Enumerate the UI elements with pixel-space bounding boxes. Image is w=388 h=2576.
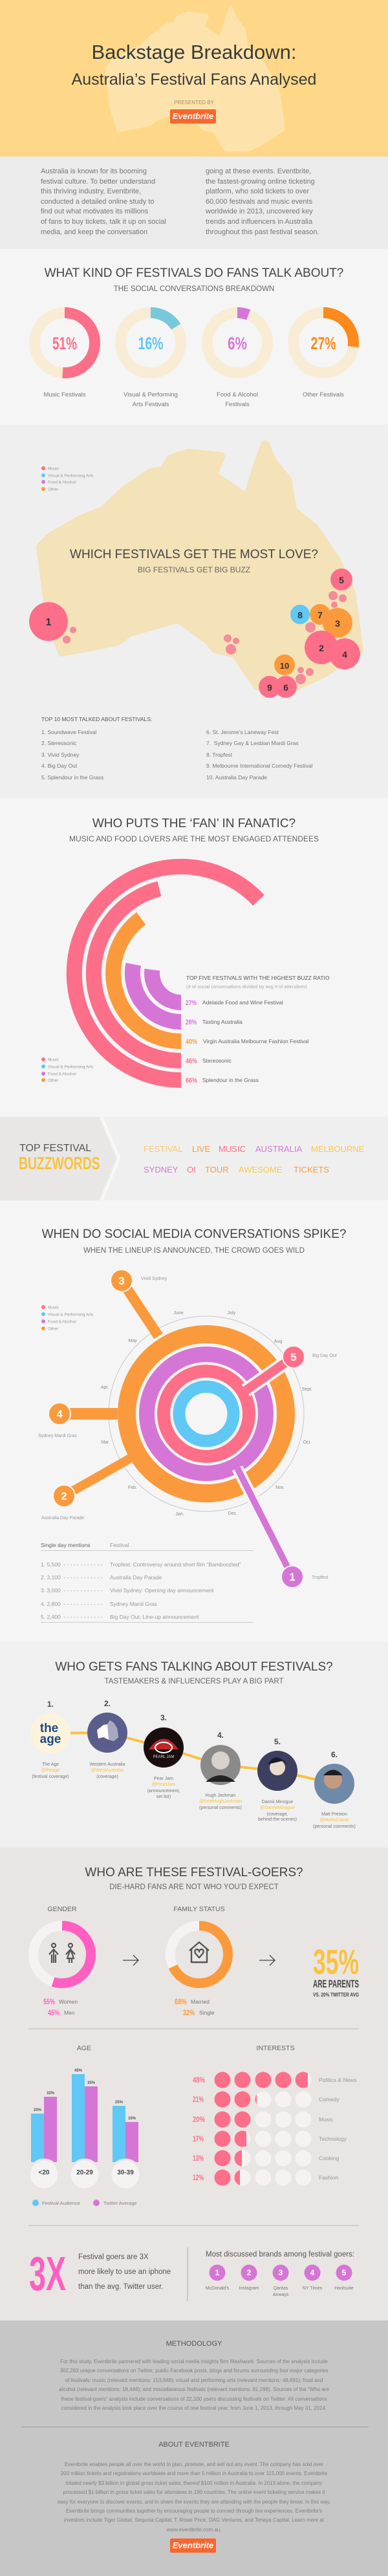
- subtitle: Australia’s Festival Fans Analysed: [72, 70, 316, 89]
- panel: map: 2. Stereosonic: [41, 740, 76, 746]
- arc chart: Virgin Australia Melbourne Fashion Festival: [203, 1038, 308, 1044]
- arc chart: Splendour in the Grass: [202, 1077, 259, 1083]
- intro text: trends and influencers in Australia: [206, 218, 312, 226]
- bubbles: 8: [297, 610, 303, 620]
- demographic charts: Women: [59, 1998, 78, 2005]
- subheading: MUSIC AND FOOD LOVERS ARE THE MOST ENGAGED ATTENDEES: [69, 834, 319, 843]
- map of australia: [41, 445, 359, 686]
- buzzword list: MUSIC: [219, 1144, 246, 1154]
- demographic charts: 2: [247, 2268, 252, 2277]
- mentions table: Australia Day Parade: [110, 1574, 162, 1581]
- donut charts: 51%: [52, 334, 77, 353]
- radial chart: Music: [48, 1305, 59, 1310]
- demographic charts: Twitter Average: [103, 2200, 137, 2206]
- mentions table: 5. 2,400 - - - - - - - - - - - -: [41, 1614, 102, 1620]
- methodology text: of festivals: music (relevant mentions: 153,848); visual and performing arts (relevant mentions: 48,691); food and: [65, 2377, 323, 2383]
- demographic charts: Married: [191, 1998, 210, 2005]
- radial chart: Tropfest: [312, 1575, 328, 1580]
- influencer chain: @RealHughJackman: [199, 1799, 242, 1804]
- radial chart: Oct.: [303, 1440, 311, 1445]
- demographic charts: than the avg. Twitter user.: [78, 2283, 163, 2291]
- demographic charts: 4: [310, 2268, 315, 2277]
- buzzword list: FESTIVAL: [144, 1144, 182, 1154]
- buzzword list: MELBOURNE: [311, 1144, 364, 1154]
- donut charts: 6%: [228, 334, 247, 353]
- heading: WHO GETS FANS TALKING ABOUT FESTIVALS?: [55, 1660, 333, 1674]
- donut charts: Music Festivals: [44, 391, 86, 398]
- demographic charts: VS. 20% TWITTER AVG: [313, 1992, 359, 1998]
- demographic charts: Airways: [273, 2293, 289, 2297]
- radial chart: Other: [48, 1327, 59, 1331]
- panel: buzzwords: BUZZWORDS: [19, 1153, 100, 1173]
- donut charts: [29, 307, 359, 408]
- radial chart: 2: [61, 1490, 67, 1502]
- intro text: worldwide in 2013, uncovered key: [206, 208, 313, 215]
- footer logo: [170, 2538, 216, 2553]
- demographic charts: 55%: [43, 1997, 55, 2006]
- radial chart: Apr.: [101, 1385, 109, 1390]
- influencer chain: @DanniiMinogue: [260, 1806, 295, 1810]
- demographic charts: 68%: [175, 1997, 187, 2006]
- about text: [58, 2462, 330, 2533]
- title: Backstage Breakdown:: [91, 41, 297, 63]
- arc chart: Visual & Performing Arts: [48, 1065, 94, 1070]
- influencer chain: @PearlJam: [152, 1782, 176, 1787]
- donut charts: Festivals: [225, 401, 250, 408]
- intro text: throughout this past festival season.: [206, 228, 319, 236]
- influencer chain: 5.: [274, 1737, 281, 1746]
- panel: map: 3. Vivid Sydney: [41, 752, 79, 758]
- influencer chain: Hugh Jackman: [206, 1793, 235, 1798]
- mentions table: 4. 2,800 - - - - - - - - - - - -: [41, 1601, 102, 1607]
- demographic charts: Men: [64, 2009, 75, 2016]
- demographic charts: NY Times: [303, 2286, 323, 2291]
- bubbles: 7: [318, 610, 323, 620]
- demographic charts: Fashion: [319, 2174, 339, 2181]
- panel: map: 9. Melbourne International Comedy Festival: [206, 763, 312, 769]
- intro text: of fans to buy tickets, talk it up on social: [41, 218, 166, 226]
- intro text: going at these events. Eventbrite,: [206, 168, 311, 175]
- radial chart: Vivid Sydney: [141, 1277, 167, 1281]
- radial chart: 1: [289, 1571, 296, 1583]
- radial chart: Dec.: [228, 1511, 237, 1516]
- panel: map: 6. St. Jerome’s Laneway Fest: [206, 729, 279, 735]
- donut charts: 16%: [138, 334, 163, 353]
- demographic charts: Cooking: [319, 2155, 339, 2161]
- influencer chain: (personal comments): [313, 1824, 356, 1829]
- radial chart: July: [228, 1311, 236, 1315]
- radial chart: Sydney Mardi Gras: [38, 1434, 77, 1438]
- intro text: Australia is known for its booming: [41, 168, 147, 175]
- legend: Visual & Performing Arts: [48, 473, 94, 479]
- demographic charts: Technology: [319, 2136, 347, 2142]
- about heading: ABOUT EVENTBRITE: [158, 2441, 230, 2449]
- influencer chain: 4.: [217, 1731, 224, 1740]
- buzzword list: AUSTRALIA: [255, 1144, 302, 1154]
- methodology text: 302,283 unique conversations on Twitter, public Facebook posts, blogs and forums surrounding four major categories: [60, 2368, 328, 2374]
- buzzword list: LIVE: [192, 1144, 210, 1154]
- buzzword list: OI: [187, 1165, 196, 1174]
- buzzword list: TOUR: [205, 1165, 229, 1174]
- donut charts: Other Festivals: [303, 391, 344, 398]
- arc chart: 40%: [186, 1038, 197, 1046]
- radial chart: May: [128, 1339, 137, 1343]
- demographic charts: [28, 1905, 359, 2301]
- panel: spike: [0, 1200, 388, 1641]
- methodology text: For this study, Eventbrite partnered with leading social media insights firm Mashwork. Sources of the analysis include: [60, 2359, 328, 2365]
- panel: buzzwords: [0, 1117, 388, 1200]
- demographic charts: 5: [342, 2268, 347, 2277]
- demographic charts: Festival Audience: [42, 2200, 80, 2206]
- methodology text: alcohol (relevant mentions: 18,446); and miscellaneous festivals (relevant mentions: 81,298). Sources of the “Who are: [59, 2387, 329, 2392]
- demographic charts: 32%: [183, 2008, 195, 2017]
- panel: map: [0, 425, 388, 798]
- subheading: THE SOCIAL CONVERSATIONS BREAKDOWN: [114, 285, 274, 293]
- demographic charts: 45%: [48, 2008, 59, 2017]
- panel: demographics: [0, 1848, 388, 2321]
- demographic charts: 25%: [115, 2101, 124, 2105]
- arc chart: Music: [48, 1058, 59, 1062]
- influencer chain: 6.: [331, 1750, 338, 1759]
- radial chart: 5: [290, 1351, 297, 1363]
- radial chart: 3: [118, 1275, 125, 1287]
- radial chart: [38, 1270, 337, 1587]
- buzzword list: [144, 1144, 364, 1174]
- about text: processed $1 billion in gross ticket sales for attendees in 190 countries. The online event ticketing service makes it: [63, 2489, 325, 2495]
- demographic charts: 35%: [87, 2081, 96, 2085]
- about text: totaled nearly $3 billion in global gross ticket sales, thereof $100 million in Australia. In 2013 alone, the company: [66, 2480, 322, 2486]
- demographic charts: AGE: [77, 2044, 91, 2052]
- demographic charts: 12%: [193, 2173, 204, 2182]
- demographic charts: 3X: [29, 2247, 66, 2300]
- top 10 list: TOP 10 MOST TALKED ABOUT FESTIVALS:: [41, 716, 152, 722]
- bubbles: 5: [339, 575, 344, 585]
- panel: map: 10. Australia Day Parade: [206, 774, 267, 781]
- radial chart: Nov.: [275, 1486, 285, 1490]
- subheading: TASTEMAKERS & INFLUENCERS PLAY A BIG PART: [105, 1678, 283, 1685]
- influencer chain: 2.: [104, 1699, 111, 1708]
- radial chart: Food & Alcohol: [48, 1319, 76, 1325]
- header map decoration: [105, 6, 285, 151]
- demographic charts: Hootsuite: [334, 2286, 354, 2291]
- bubbles: 10: [280, 661, 289, 671]
- intro text: conducted a detailed online study to: [41, 198, 155, 206]
- demographic charts: <20: [39, 2169, 50, 2176]
- demographic charts: Single: [199, 2009, 215, 2016]
- heading: WHAT KIND OF FESTIVALS DO FANS TALK ABOUT?: [45, 266, 343, 280]
- footer logo: Eventbrite: [173, 2540, 213, 2550]
- arc chart: Tasting Australia: [202, 1019, 242, 1025]
- demographic charts: 20-29: [76, 2169, 93, 2176]
- panel: map: 7. Sydney Gay & Lesbian Mardi Gras: [206, 740, 299, 746]
- mentions table: 3. 3,000 - - - - - - - - - - - -: [41, 1587, 102, 1594]
- demographic charts: more likely to use an iphone: [78, 2268, 171, 2276]
- mentions table: 2. 3,100 - - - - - - - - - - - -: [41, 1574, 102, 1581]
- intro text: [0, 157, 388, 249]
- demographic charts: 1: [215, 2268, 220, 2277]
- mentions table: [41, 1542, 253, 1623]
- legend: Food & Alcohol: [48, 480, 76, 485]
- heading: WHEN DO SOCIAL MEDIA CONVERSATIONS SPIKE?: [42, 1228, 346, 1241]
- influencer chain: set list): [156, 1795, 171, 1799]
- methodology heading: METHODOLOGY: [166, 2340, 222, 2348]
- demographic charts: 30-39: [117, 2169, 134, 2176]
- methodology text: these festival-goers” analysis include conversations of 22,100 users discussing festivals on Twitter. All conversations: [61, 2396, 327, 2402]
- influencer chain: 3.: [160, 1713, 167, 1722]
- influencer chain: (personal comments): [199, 1806, 242, 1810]
- panel: festival types: [0, 249, 388, 425]
- bubbles: 1: [46, 617, 52, 628]
- demographic charts: FAMILY STATUS: [173, 1905, 225, 1913]
- donut charts: 27%: [310, 334, 336, 353]
- heading: WHICH FESTIVALS GET THE MOST LOVE?: [70, 548, 318, 561]
- about text: www.eventbrite.com.au.: [167, 2527, 221, 2533]
- demographic charts: Instagram: [239, 2286, 259, 2291]
- methodology text: [59, 2359, 329, 2411]
- influencer chain: Western Australia: [90, 1762, 125, 1767]
- about text: investors include Tiger Global, Sequoia Capital, T. Rowe Price, DAG Ventures, and Tenaya Capital. Learn more at: [64, 2517, 324, 2523]
- arc chart: 46%: [186, 1057, 197, 1065]
- demographic charts: Politics & News: [319, 2077, 357, 2083]
- intro text: this thriving industry, Eventbrite,: [41, 188, 141, 195]
- influencer chain: [30, 1699, 356, 1829]
- radial chart: Mar.: [101, 1440, 110, 1445]
- buzzword list: AWESOME: [239, 1165, 282, 1174]
- about text: easy for everyone to discover events, and to share the events they are attending with the people they know. In this way,: [58, 2499, 330, 2505]
- legend: Music: [48, 467, 59, 471]
- arc chart: 66%: [186, 1077, 197, 1085]
- arc chart: Other: [48, 1079, 59, 1083]
- buzzword list: TICKETS: [294, 1165, 329, 1174]
- influencer chain: age: [40, 1733, 61, 1746]
- mentions table: Sydney Mardi Gras: [110, 1601, 157, 1607]
- arc chart: 27%: [186, 999, 197, 1007]
- mentions table: Vivid Sydney: Opening day announcement: [110, 1587, 214, 1594]
- presented by: PRESENTED BY: [174, 100, 214, 105]
- radial chart: 4: [56, 1408, 63, 1420]
- demographic charts: 21%: [193, 2095, 204, 2104]
- subheading: BIG FESTIVALS GET BIG BUZZ: [138, 565, 250, 574]
- about text: Eventbrite brings communities together by encouraging people to connect through live experiences. Eventbrite’s: [66, 2508, 322, 2514]
- influencer chain: @MattsCravat: [320, 1818, 349, 1823]
- demographic charts: Comedy: [319, 2096, 339, 2103]
- mentions table: Festival: [110, 1542, 129, 1548]
- eventbrite logo: [170, 109, 216, 124]
- demographic charts: INTERESTS: [257, 2044, 294, 2052]
- subheading: WHEN THE LINEUP IS ANNOUNCED, THE CROWD GOES WILD: [83, 1247, 305, 1255]
- panel: map: 4. Big Day Out: [41, 763, 77, 769]
- bubbles: 3: [335, 618, 340, 629]
- demographic charts: McDonald's: [206, 2286, 230, 2291]
- demographic charts: 32%: [47, 2092, 55, 2095]
- demographic charts: Music: [319, 2116, 334, 2123]
- intro text: the fastest-growing online ticketing: [206, 178, 315, 186]
- demographic charts: GENDER: [48, 1905, 77, 1913]
- influencer chain: (coverage): [96, 1775, 118, 1779]
- influencer chain: Pear Jam: [154, 1777, 173, 1781]
- radial chart: Aug: [274, 1339, 282, 1344]
- arc chart: TOP FIVE FESTIVALS WITH THE HIGHEST BUZZ RATIO: [186, 975, 330, 981]
- arc chart: 28%: [186, 1019, 197, 1026]
- radial chart: Visual & Performing Arts: [48, 1313, 94, 1317]
- mentions table: Single day mentions: [41, 1542, 91, 1548]
- radial chart: Feb.: [128, 1486, 137, 1490]
- demographic charts: 3: [279, 2268, 283, 2277]
- influencer chain: Matt Preston: [321, 1812, 347, 1817]
- panel: fanatic: [0, 798, 388, 1117]
- demographic charts: Most discussed brands among festival goers:: [206, 2251, 354, 2258]
- arc chart: (# of social conversations divided by avg # of attendees): [186, 984, 307, 990]
- bubbles: [29, 568, 360, 698]
- demographic charts: Festival goers are 3X: [78, 2253, 149, 2261]
- bubbles: 2: [319, 643, 324, 653]
- panel: footer: [0, 2321, 388, 2576]
- mentions table: Big Day Out: Line-up announcement: [110, 1614, 199, 1620]
- radial chart: Australia Day Parade: [41, 1516, 84, 1521]
- demographic charts: 17%: [193, 2134, 204, 2143]
- demographic charts: 20%: [34, 2108, 42, 2112]
- arc chart: Adelaide Food and Wine Festival: [202, 999, 283, 1006]
- buzzwords label: TOP FESTIVAL: [19, 1143, 91, 1154]
- demographic charts: 35%: [313, 1943, 359, 1982]
- about text: 200 million tickets and registrations worldwide and more than 5 million in Australia to over 115,000 events. Eventbrite: [61, 2471, 327, 2476]
- demographic charts: 45%: [74, 2069, 83, 2073]
- influencer chain: Dannii Minogue: [262, 1800, 293, 1804]
- intro text: 60,000 festivals and music events: [206, 198, 312, 206]
- panel: map: 5. Splendour in the Grass: [41, 774, 103, 781]
- panel: map: 8. Tropfest: [206, 752, 232, 758]
- intro text: find out what motivates its millions: [41, 208, 148, 215]
- influencer chain: (festival coverage): [32, 1775, 69, 1779]
- donut charts: Visual & Performing: [124, 391, 178, 398]
- demographic charts: 48%: [193, 2075, 205, 2084]
- radial chart: Big Day Out: [312, 1354, 337, 1358]
- radial chart: Jan.: [175, 1512, 184, 1517]
- demographic charts: 13%: [193, 2154, 204, 2163]
- legend: [41, 466, 94, 492]
- header panel: [0, 0, 388, 157]
- mentions table: 1. 5,500 - - - - - - - - - - - -: [41, 1561, 102, 1568]
- influencer chain: PEARL JAM: [153, 1755, 175, 1759]
- influencer chain: the: [40, 1722, 58, 1735]
- influencer chain: (coverage,: [266, 1812, 288, 1817]
- methodology text: considered in the analysis took place over the course of one festival year, from June 1, 2013, through May 31, 2014.: [61, 2405, 327, 2411]
- demographic charts: 20%: [193, 2115, 205, 2124]
- panel: map: 1. Soundwave Festival: [41, 729, 97, 735]
- donut charts: Food & Alcohol: [217, 391, 258, 398]
- influencer chain: @theage: [41, 1768, 59, 1773]
- bubbles: 9: [267, 682, 272, 693]
- donut charts: Arts Festivals: [132, 401, 169, 408]
- arc chart: Food & Alcohol: [48, 1072, 76, 1076]
- demographic charts: 15%: [128, 2117, 136, 2121]
- arc chart: Stereosonic: [202, 1057, 232, 1064]
- influencer chain: behind-the-scenes): [258, 1817, 297, 1822]
- heading: WHO PUTS THE ‘FAN’ IN FANATIC?: [92, 817, 296, 830]
- legend: Other: [48, 488, 59, 492]
- intro text: media, and keep the conversation: [41, 228, 147, 236]
- buzzword list: SYDNEY: [144, 1165, 178, 1174]
- influencer chain: (announcement,: [147, 1789, 180, 1793]
- eventbrite logo: Eventbrite: [173, 111, 213, 121]
- intro text: festival culture. To better understand: [41, 178, 155, 186]
- bubbles: 6: [283, 682, 288, 693]
- intro text: platform, who sold tickets to over: [206, 188, 309, 195]
- arc chart: [41, 859, 330, 1088]
- influencer chain: The Age: [42, 1762, 59, 1767]
- radial chart: June: [173, 1311, 184, 1315]
- subheading: DIE-HARD FANS ARE NOT WHO YOU’D EXPECT: [109, 1883, 279, 1891]
- bubbles: 4: [342, 649, 347, 660]
- panel: influencers: [0, 1641, 388, 1848]
- mentions table: Tropfest: Controversy around short film “Bamboozled”: [110, 1561, 241, 1568]
- heading: WHO ARE THESE FESTIVAL-GOERS?: [85, 1866, 303, 1879]
- about text: Eventbrite enables people all over the world to plan, promote, and sell out any event. The company has sold over: [65, 2462, 323, 2467]
- radial chart: Sept.: [302, 1387, 312, 1392]
- demographic charts: Qantas: [274, 2286, 288, 2291]
- influencer chain: @WestAustralia: [91, 1768, 124, 1773]
- influencer chain: 1.: [47, 1700, 54, 1709]
